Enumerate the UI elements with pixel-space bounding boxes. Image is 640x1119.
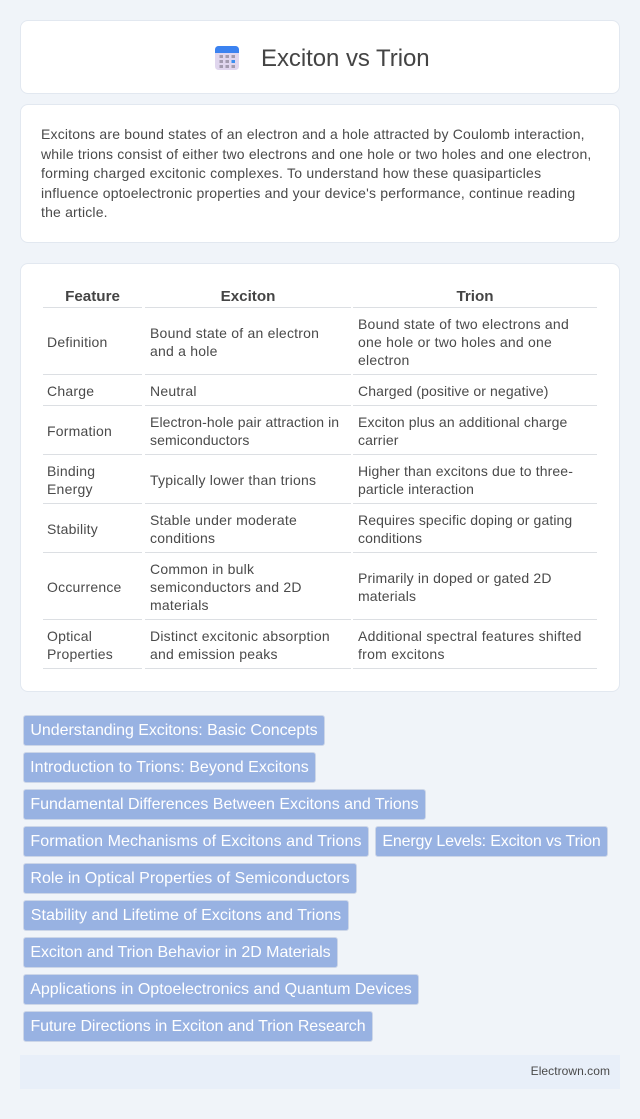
footer credit: Electrown.com bbox=[531, 1064, 610, 1078]
table header: Feature: Feature bbox=[65, 288, 120, 305]
trion optical properties: from excitons bbox=[358, 646, 445, 662]
exciton stability bbox=[150, 512, 297, 546]
exciton optical properties: and emission peaks bbox=[150, 646, 278, 662]
tag: Energy Levels bbox=[375, 826, 608, 857]
exciton optical properties: Distinct excitonic absorption bbox=[150, 628, 330, 644]
trion definition: one hole or two holes and one bbox=[358, 334, 552, 350]
tag: Applications bbox=[23, 974, 419, 1005]
tag: Behavior in 2D Materials: Exciton and Trion Behavior in 2D Materials bbox=[30, 944, 331, 961]
exciton occurrence bbox=[150, 561, 302, 613]
exciton occurrence: Common in bulk bbox=[150, 561, 254, 577]
tag: Fundamental Differences: Fundamental Differences Between Excitons and Trions bbox=[30, 796, 419, 813]
footer bbox=[20, 1055, 620, 1089]
trion formation bbox=[358, 414, 567, 448]
row: Binding Energy: Binding bbox=[47, 463, 95, 479]
tag: Introduction to Trions: Introduction to Trions: Beyond Excitons bbox=[30, 759, 309, 776]
trion binding energy bbox=[358, 463, 573, 497]
trion definition: electron bbox=[358, 352, 410, 368]
row: Optical Properties: Properties bbox=[47, 646, 113, 662]
tag: Introduction to Trions bbox=[23, 752, 316, 783]
intro text: Excitons are bound states of an electron and a hole attracted by Coulomb interaction, bbox=[41, 126, 585, 142]
tag: Role in Optical Properties: Role in Optical Properties of Semiconductors bbox=[30, 870, 350, 887]
exciton charge: Neutral bbox=[150, 383, 197, 399]
tag: Understanding Excitons bbox=[23, 715, 325, 746]
icon: calendar bbox=[215, 46, 239, 70]
tag: Applications: Applications in Optoelectronics and Quantum Devices bbox=[30, 981, 412, 998]
trion charge: Charged (positive or negative) bbox=[358, 383, 549, 399]
row: Definition: Definition bbox=[47, 334, 108, 350]
tag: Formation Mechanisms: Formation Mechanisms of Excitons and Trions bbox=[30, 833, 362, 850]
intro text: forming charged excitonic complexes. To understand how these quasiparticles bbox=[41, 165, 541, 181]
exciton optical properties bbox=[150, 628, 330, 662]
comparison table panel bbox=[20, 263, 620, 692]
exciton definition bbox=[150, 325, 319, 359]
intro panel bbox=[20, 104, 620, 243]
tag: Role in Optical Properties bbox=[23, 863, 357, 894]
row: Charge: Charge bbox=[47, 383, 94, 399]
trion occurrence bbox=[358, 570, 552, 604]
header panel bbox=[20, 20, 620, 94]
tag: Future Directions bbox=[23, 1011, 373, 1042]
trion occurrence: materials bbox=[358, 588, 416, 604]
row: Binding Energy bbox=[47, 463, 95, 497]
title: Exciton vs Trion bbox=[261, 45, 430, 72]
row: Optical Properties bbox=[47, 628, 113, 662]
exciton occurrence: semiconductors and 2D bbox=[150, 579, 302, 595]
row: Optical Properties: Optical bbox=[47, 628, 92, 644]
intro text: the article. bbox=[41, 204, 108, 220]
trion formation: Exciton plus an additional charge bbox=[358, 414, 567, 430]
intro text: influence optoelectronic properties and your device's performance, continue reading bbox=[41, 184, 575, 200]
exciton occurrence: materials bbox=[150, 597, 209, 613]
exciton definition: Bound state of an electron bbox=[150, 325, 319, 341]
exciton formation: Electron-hole pair attraction in bbox=[150, 414, 339, 430]
tag: Stability and Lifetime: Stability and Lifetime of Excitons and Trions bbox=[31, 907, 341, 924]
table header: Trion: Trion bbox=[456, 288, 494, 305]
tag: Formation Mechanisms bbox=[23, 826, 369, 857]
tag: Stability and Lifetime bbox=[23, 900, 349, 931]
row: Formation: Formation bbox=[47, 423, 112, 439]
exciton stability: Stable under moderate bbox=[150, 512, 297, 528]
trion binding energy: Higher than excitons due to three- bbox=[358, 463, 573, 479]
trion occurrence: Primarily in doped or gated 2D bbox=[358, 570, 552, 586]
tag: Energy Levels: Energy Levels: Exciton vs Trion bbox=[382, 833, 601, 850]
row: Occurrence: Occurrence bbox=[47, 579, 122, 595]
exciton stability: conditions bbox=[150, 530, 215, 546]
intro text bbox=[41, 126, 592, 220]
tag: Fundamental Differences bbox=[23, 789, 426, 820]
trion binding energy: particle interaction bbox=[358, 481, 474, 497]
trion stability: conditions bbox=[358, 530, 422, 546]
trion formation: carrier bbox=[358, 432, 399, 448]
tag: Behavior in 2D Materials bbox=[23, 937, 338, 968]
trion definition: Bound state of two electrons and bbox=[358, 316, 569, 332]
trion stability bbox=[358, 512, 572, 546]
exciton formation: semiconductors bbox=[150, 432, 249, 448]
trion optical properties bbox=[358, 628, 582, 662]
row: Stability: Stability bbox=[47, 521, 98, 537]
tag: Future Directions: Future Directions in Exciton and Trion Research bbox=[30, 1018, 366, 1035]
trion definition bbox=[358, 316, 569, 368]
trion stability: Requires specific doping or gating bbox=[358, 512, 572, 528]
exciton binding energy: Typically lower than trions bbox=[150, 472, 316, 488]
trion optical properties: Additional spectral features shifted bbox=[358, 628, 582, 644]
exciton formation bbox=[150, 414, 339, 448]
intro text: while trions consist of either two electrons and one hole or two holes and one electron, bbox=[41, 146, 592, 162]
row: Binding Energy: Energy bbox=[47, 481, 93, 497]
table header: Exciton: Exciton bbox=[221, 288, 275, 305]
tag: Understanding Excitons: Understanding Excitons: Basic Concepts bbox=[30, 722, 318, 739]
exciton definition: and a hole bbox=[150, 343, 218, 359]
